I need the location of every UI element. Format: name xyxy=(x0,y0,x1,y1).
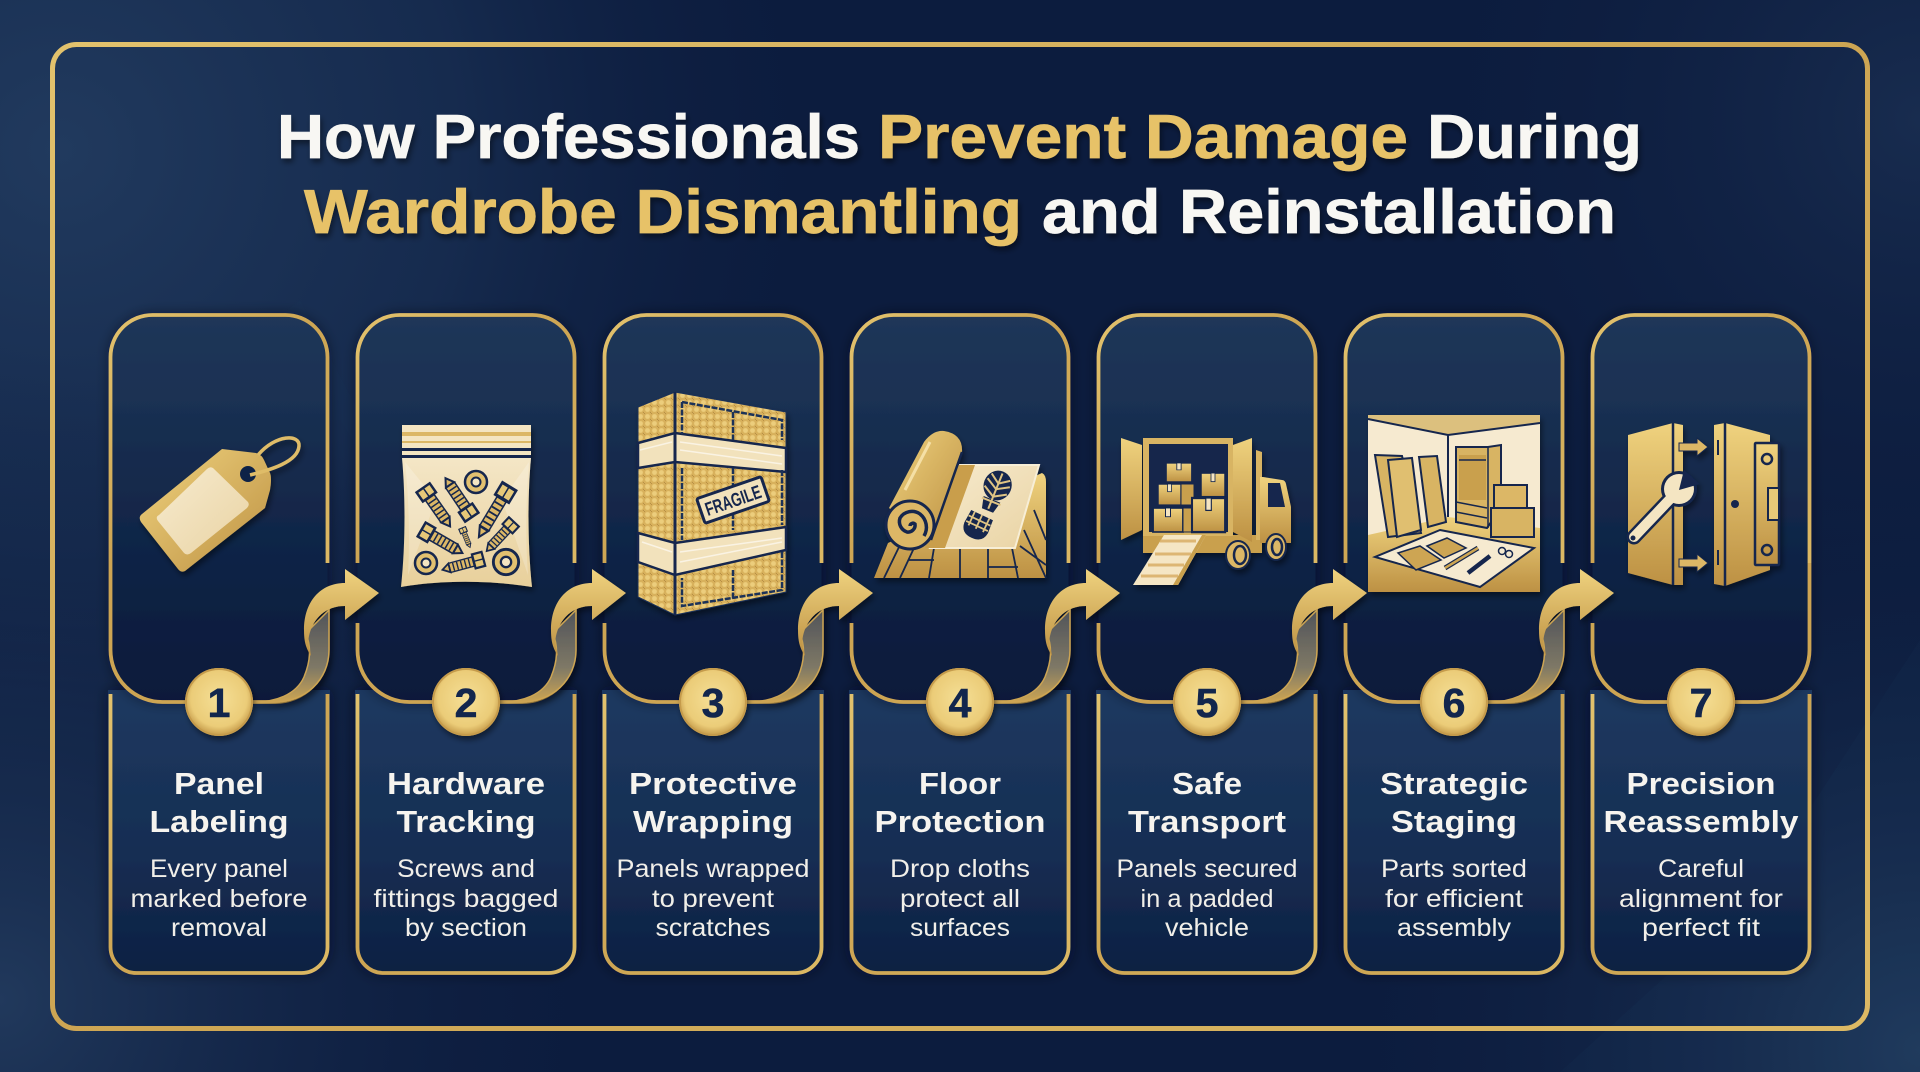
text: step 7 xyxy=(1604,766,1799,942)
icon: staging room xyxy=(1368,415,1540,592)
number badge 1: 1 xyxy=(208,680,230,726)
text: step 4: Floor xyxy=(919,766,1001,801)
title: Prevent Damage xyxy=(878,103,1408,172)
number badge 6: 6 xyxy=(1443,680,1465,726)
text: step 7: perfect fit xyxy=(1642,914,1760,942)
icon: price tag xyxy=(140,438,299,572)
arrow 5 to 6 xyxy=(1242,569,1367,702)
text: step 6: Staging xyxy=(1391,804,1517,839)
text: step 5: Panels secured xyxy=(1116,855,1298,883)
text: step 7: Precision xyxy=(1626,766,1776,801)
panel: step 5 card xyxy=(1096,315,1318,973)
number badge 6 xyxy=(1420,668,1488,736)
text: step 2 xyxy=(374,766,558,942)
title: How Professionals xyxy=(277,103,860,172)
number badge 4 xyxy=(926,668,994,736)
number badge 4: 4 xyxy=(949,680,972,726)
text: step 1: removal xyxy=(171,914,267,942)
title: During xyxy=(1427,103,1642,172)
text: step 6 xyxy=(1380,766,1528,942)
icon: reassembly doors, level and wrench xyxy=(1628,423,1779,586)
arrow 3 to 4 xyxy=(748,569,873,702)
text: step 4: surfaces xyxy=(910,914,1010,942)
text: step 5: Safe xyxy=(1172,766,1242,801)
number badge 7: 7 xyxy=(1690,680,1712,726)
text: step 4: Drop cloths xyxy=(890,855,1030,883)
number badge 2 xyxy=(432,668,500,736)
text: step 1: Every panel xyxy=(150,855,288,883)
text: step 2: Hardware xyxy=(387,766,545,801)
title xyxy=(277,103,1642,247)
text: step 2: by section xyxy=(405,914,527,942)
text: step 2: fittings bagged xyxy=(374,885,558,913)
text: step 2: Tracking xyxy=(396,804,536,839)
number badge 5 xyxy=(1173,668,1241,736)
text: step 1 xyxy=(130,766,308,942)
text: step 3: Panels wrapped xyxy=(616,855,810,883)
text: step 3 xyxy=(616,766,810,942)
panel: step 7 card xyxy=(1590,315,1812,973)
arrow 4 to 5 xyxy=(995,569,1120,702)
arrow 1 to 2 xyxy=(254,569,379,702)
icon: hardware bag xyxy=(401,425,532,587)
arrow 6 to 7 xyxy=(1489,569,1614,702)
text: step 4 xyxy=(874,766,1046,942)
panel: step 2 card xyxy=(355,315,577,973)
arrow 2 to 3 xyxy=(501,569,626,702)
title: Wardrobe Dismantling xyxy=(304,178,1022,247)
title: and Reinstallation xyxy=(1042,178,1616,247)
text: step 2: Screws and xyxy=(397,855,535,883)
number badge 5: 5 xyxy=(1196,680,1218,726)
icon: bubble-wrapped box: FRAGILE xyxy=(703,482,764,521)
text: step 6: Strategic xyxy=(1380,766,1528,801)
panel: step 4 card xyxy=(849,315,1071,973)
text: step 6: for efficient xyxy=(1385,885,1523,913)
text: step 3: Wrapping xyxy=(633,804,793,839)
number badge 3: 3 xyxy=(702,680,724,726)
text: step 5: vehicle xyxy=(1165,914,1249,942)
text: step 3: scratches xyxy=(656,914,770,942)
number badge 7 xyxy=(1667,668,1735,736)
text: step 1: Labeling xyxy=(150,804,288,839)
text: step 7: alignment for xyxy=(1619,885,1783,913)
panel: step 1 card xyxy=(108,315,330,973)
text: step 3: Protective xyxy=(629,766,797,801)
icon: bubble-wrapped box xyxy=(638,392,786,615)
icon: floor protection roll and boot prints xyxy=(874,431,1046,578)
text: step 5 xyxy=(1116,766,1298,942)
number badge 1 xyxy=(185,668,253,736)
panel: step 3 card xyxy=(602,315,824,973)
text: step 3: to prevent xyxy=(652,885,774,913)
text: step 5: in a padded xyxy=(1140,885,1274,913)
text: step 7: Reassembly xyxy=(1604,804,1799,839)
number badge 2: 2 xyxy=(455,680,477,726)
text: step 1: marked before xyxy=(130,885,308,913)
text: step 6: Parts sorted xyxy=(1381,855,1527,883)
number badge 3 xyxy=(679,668,747,736)
text: step 4: protect all xyxy=(900,885,1020,913)
text: step 1: Panel xyxy=(174,766,264,801)
text: step 7: Careful xyxy=(1658,855,1744,883)
text: step 5: Transport xyxy=(1128,804,1286,839)
panel: step 6 card xyxy=(1343,315,1565,973)
icon: moving truck with ramp xyxy=(1121,438,1291,585)
text: step 4: Protection xyxy=(874,804,1046,839)
text: step 6: assembly xyxy=(1397,914,1512,942)
